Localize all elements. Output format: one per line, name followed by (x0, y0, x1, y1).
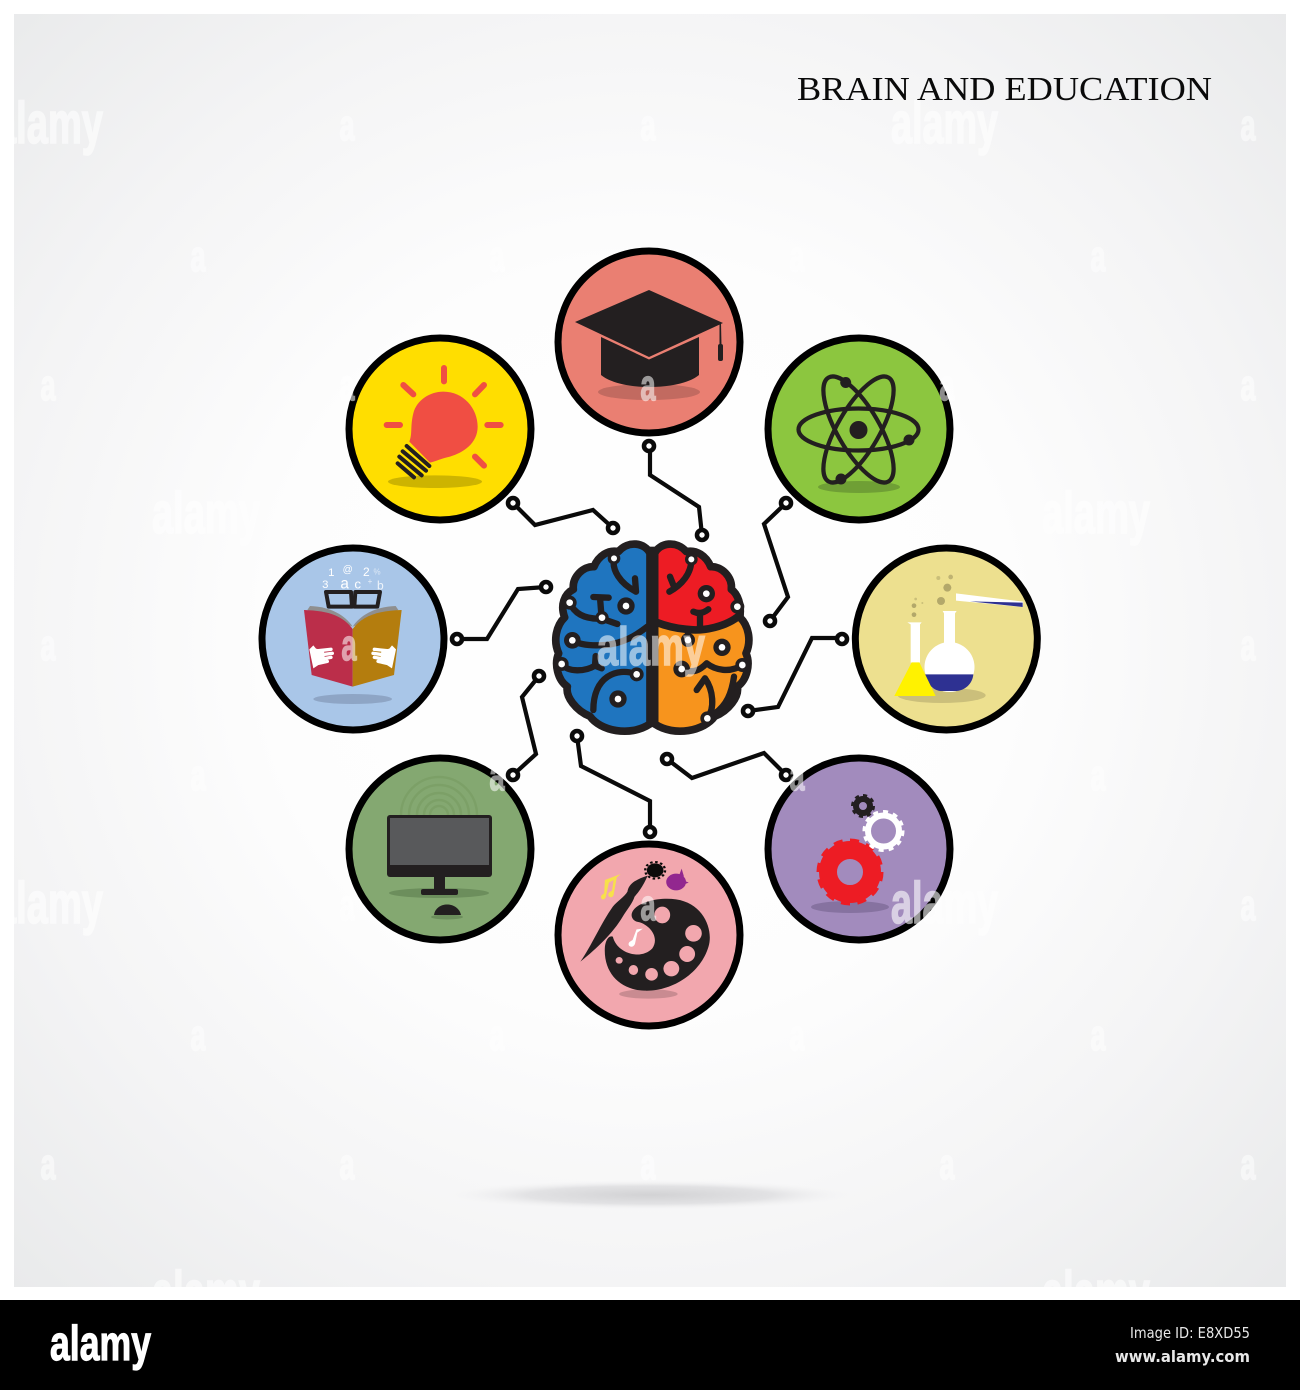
icon: floating symbols: 1 (328, 567, 334, 579)
icon: floating symbols: 2 (363, 565, 370, 579)
connector: technology to brain (508, 671, 544, 780)
watermark tile pattern: a (190, 1011, 206, 1060)
watermark tile pattern: a (790, 232, 805, 281)
watermark tile pattern: a (40, 361, 56, 410)
icon: glasses (326, 592, 380, 607)
right hemisphere orange (655, 610, 749, 731)
icon: red gear (820, 842, 880, 902)
panel: reading (262, 548, 444, 730)
large watermark over gears: alamy (891, 871, 998, 936)
ground shadow (445, 1180, 855, 1210)
icon: white gear (864, 812, 902, 850)
icon: open book (304, 606, 402, 687)
watermark tile pattern: a (40, 621, 56, 670)
connector: reading to brain (452, 582, 551, 644)
centre fissure (649, 547, 656, 727)
brain circuit nodes (555, 552, 749, 725)
connector: idea to brain (508, 498, 618, 533)
large watermarks on background: alamy (1042, 1260, 1150, 1325)
icon: floating symbols: @ (343, 565, 353, 576)
right circuit traces (669, 559, 742, 718)
watermark tile pattern: a (490, 1011, 505, 1060)
panel: art (558, 844, 740, 1026)
footer bar (0, 1300, 1300, 1390)
small watermarks over circles: a (940, 361, 955, 410)
title: BRAIN AND EDUCATION (797, 71, 1212, 108)
icon: music notes (601, 874, 643, 947)
watermark tile pattern: a (1090, 751, 1106, 800)
small watermarks over circles: a (340, 361, 355, 410)
small watermarks over circles: a (790, 751, 805, 800)
connector: graduation to brain (644, 441, 707, 540)
small watermarks over circles: a (340, 881, 355, 930)
large watermarks on background: alamy (152, 1260, 260, 1325)
large watermarks on background: alamy (1042, 481, 1150, 546)
large watermarks on background: alamy (152, 481, 260, 546)
watermark tile pattern: a (1240, 101, 1256, 150)
watermark tile pattern: a (790, 1011, 805, 1060)
connector: science to brain (764, 498, 791, 626)
connector lines (452, 441, 847, 837)
icon: floating symbols: 3 (322, 579, 328, 591)
icon: graduation cap (575, 290, 723, 387)
watermark tile pattern: a (490, 232, 505, 281)
right hemisphere red (655, 544, 740, 630)
icon: floating symbols: a (340, 575, 349, 592)
icon: floating symbols: + (368, 577, 373, 586)
watermark tile pattern: a (190, 232, 206, 281)
icon: flasks (894, 575, 1023, 696)
brain (555, 544, 749, 731)
icon: floating symbols: c (354, 576, 361, 591)
brain watermark: alamy (597, 617, 705, 677)
icon: floating symbols (322, 565, 384, 592)
watermark tile pattern: a (1240, 361, 1256, 410)
connector: art to brain (572, 731, 655, 837)
watermark tile pattern: a (940, 1140, 955, 1189)
small watermarks over circles: a (640, 361, 656, 410)
large watermarks on background (0, 91, 1150, 1325)
watermark tile pattern: a (190, 751, 206, 800)
panel: science (768, 338, 950, 520)
small watermarks over circles (340, 361, 955, 930)
panel: graduation (558, 251, 740, 433)
icon: hands (309, 645, 396, 668)
watermark tile pattern: a (40, 1140, 56, 1189)
panel: chemistry (855, 548, 1037, 730)
small watermarks over circles: a (490, 751, 505, 800)
panel: technology (349, 758, 531, 940)
watermark tile pattern (40, 101, 1256, 1189)
watermark tile pattern: a (340, 101, 355, 150)
watermark tile pattern: a (640, 1140, 656, 1189)
left hemisphere (556, 544, 650, 731)
icon: floating symbols: b (377, 578, 384, 592)
watermark tile pattern: a (1240, 1140, 1256, 1189)
icon: black gear (852, 796, 874, 816)
footer url: www.alamy.com (1115, 1347, 1250, 1366)
large watermarks on background: alamy (891, 91, 998, 156)
panel: engineering (768, 758, 950, 940)
icon: wifi rings (401, 777, 477, 853)
panel: idea (349, 338, 531, 520)
footer image id: Image ID: E8XD55 (1130, 1324, 1250, 1342)
left circuit traces (562, 558, 647, 710)
watermark tile pattern: a (1090, 1011, 1106, 1060)
connector: chemistry to brain (743, 634, 847, 716)
watermark tile pattern: a (1240, 621, 1256, 670)
icon: floating symbols: % (373, 568, 381, 577)
icon: atom (798, 367, 918, 492)
watermark tile pattern: a (640, 101, 656, 150)
connector: engineering to brain (662, 753, 791, 780)
icon: monitor (387, 815, 492, 895)
footer logo: alamy (50, 1317, 151, 1371)
watermark tile pattern: a (1090, 232, 1106, 281)
icon: palette and brush (580, 862, 710, 999)
icon: mouse (431, 904, 463, 920)
small watermarks over circles: a (342, 621, 357, 670)
icon: light bulb (387, 368, 501, 477)
small watermarks over circles: a (640, 881, 656, 930)
watermark tile pattern: a (1240, 881, 1256, 930)
watermark tile pattern: a (340, 1140, 355, 1189)
